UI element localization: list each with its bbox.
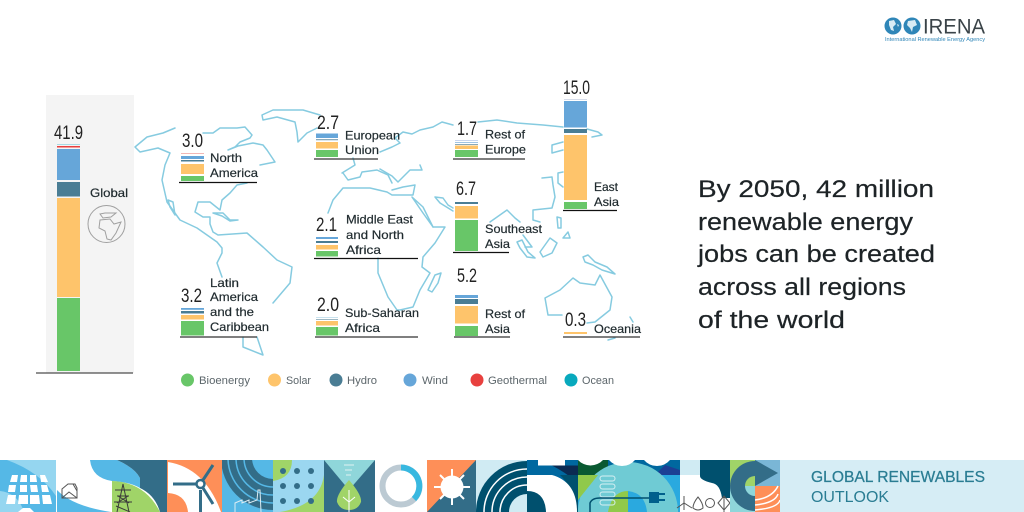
chart: North America: 3.0 [182,131,203,152]
chart: Latin America and the Caribbean: Caribbean [210,320,269,334]
tile: half circle [527,460,578,512]
chart: Southeast Asia: 6.7 [456,179,476,200]
chart: Sub-Saharan Africa: 2.0 [317,295,339,316]
world map outline [135,110,633,355]
chart: European Union [314,113,400,159]
tile: solar panel [0,460,56,512]
legend: Ocean [582,375,614,387]
chart: Rest of Asia [454,266,526,337]
stacked bar: global [57,144,80,371]
tile: plug [578,460,680,512]
chart: Latin America and the Caribbean: Latin [210,276,239,290]
chart: Rest of Europe: Europe [485,142,526,156]
label: global: Global [90,186,128,200]
chart: Rest of Europe [453,119,526,159]
chart: East Asia: Asia [594,195,619,209]
tile: leaf [324,460,375,512]
chart: Rest of Asia: Asia [485,322,510,336]
chart: European Union: European [345,128,400,142]
tile: small icons [677,460,730,512]
chart: Rest of Europe: 1.7 [457,119,477,140]
chart: Southeast Asia: Southeast [485,222,543,236]
chart: Oceania [563,310,641,337]
headline text: By 2050, 42 million [698,176,934,203]
chart: Latin America and the Caribbean [180,276,269,337]
tile: circular emblem [730,460,780,512]
chart: Latin America and the Caribbean: and the [210,305,254,319]
chart: Rest of Asia: Rest of [485,307,526,321]
tile: wind turbine [167,460,222,512]
value: global total: 41.9 [54,123,83,144]
logo: IRENA: IRENA [923,16,985,38]
legend [181,374,614,387]
chart: North America [179,131,258,182]
chart: East Asia: East [594,180,619,194]
footer band: Global Renewables Outlook: GLOBAL RENEWABLES [811,469,985,486]
chart: Southeast Asia [453,179,543,252]
headline text: across all regions [698,274,906,301]
tile: sun [427,460,476,512]
chart: Oceania: Oceania [594,322,641,336]
chart: Middle East and North Africa [314,212,418,258]
footer band: Global Renewables Outlook [780,460,1024,512]
chart: Southeast Asia: Asia [485,237,510,251]
chart: North America: America [210,166,258,180]
chart: Middle East and North Africa: Middle East [346,212,414,226]
tile: pylon with swooshes [56,460,167,512]
tile: dot grid [273,460,324,512]
headline text: of the world [698,307,845,334]
legend: Geothermal [488,375,547,387]
chart: Rest of Asia: 5.2 [457,266,477,287]
legend: Hydro [347,375,377,387]
chart: European Union: Union [345,143,379,157]
legend: Bioenergy [199,375,250,387]
footer band: Global Renewables Outlook: OUTLOOK [811,489,890,506]
footer illustration strip [0,460,780,512]
chart: European Union: 2.7 [317,113,339,134]
chart: Sub-Saharan Africa [315,295,419,337]
tile: ring [375,460,427,512]
panel: global [36,95,134,373]
tile: factory arcs [222,460,273,512]
legend: Wind [422,375,448,387]
icon: globe [88,206,125,242]
chart: Sub-Saharan Africa: Sub-Saharan [345,306,419,320]
chart: Middle East and North Africa: 2.1 [316,215,337,236]
chart: Rest of Europe: Rest of [485,128,526,142]
tile: concentric arcs [476,460,527,512]
chart: Middle East and North Africa: and North [346,228,404,242]
chart: East Asia: 15.0 [563,78,590,99]
legend: Solar [286,375,311,387]
logo: IRENA [884,16,985,43]
logo: IRENA: International Renewable Energy Agency [885,37,985,43]
chart: North America: North [210,151,242,165]
chart: Latin America and the Caribbean: America [210,290,258,304]
chart: Sub-Saharan Africa: Africa [345,321,380,335]
chart: Oceania: 0.3 [565,310,586,331]
chart: Middle East and North Africa: Africa [346,243,381,257]
chart: Latin America and the Caribbean: 3.2 [181,286,202,307]
headline text [697,176,935,334]
headline text: renewable energy [698,209,913,236]
chart: East Asia [563,78,619,210]
headline text: jobs can be created [697,241,935,268]
